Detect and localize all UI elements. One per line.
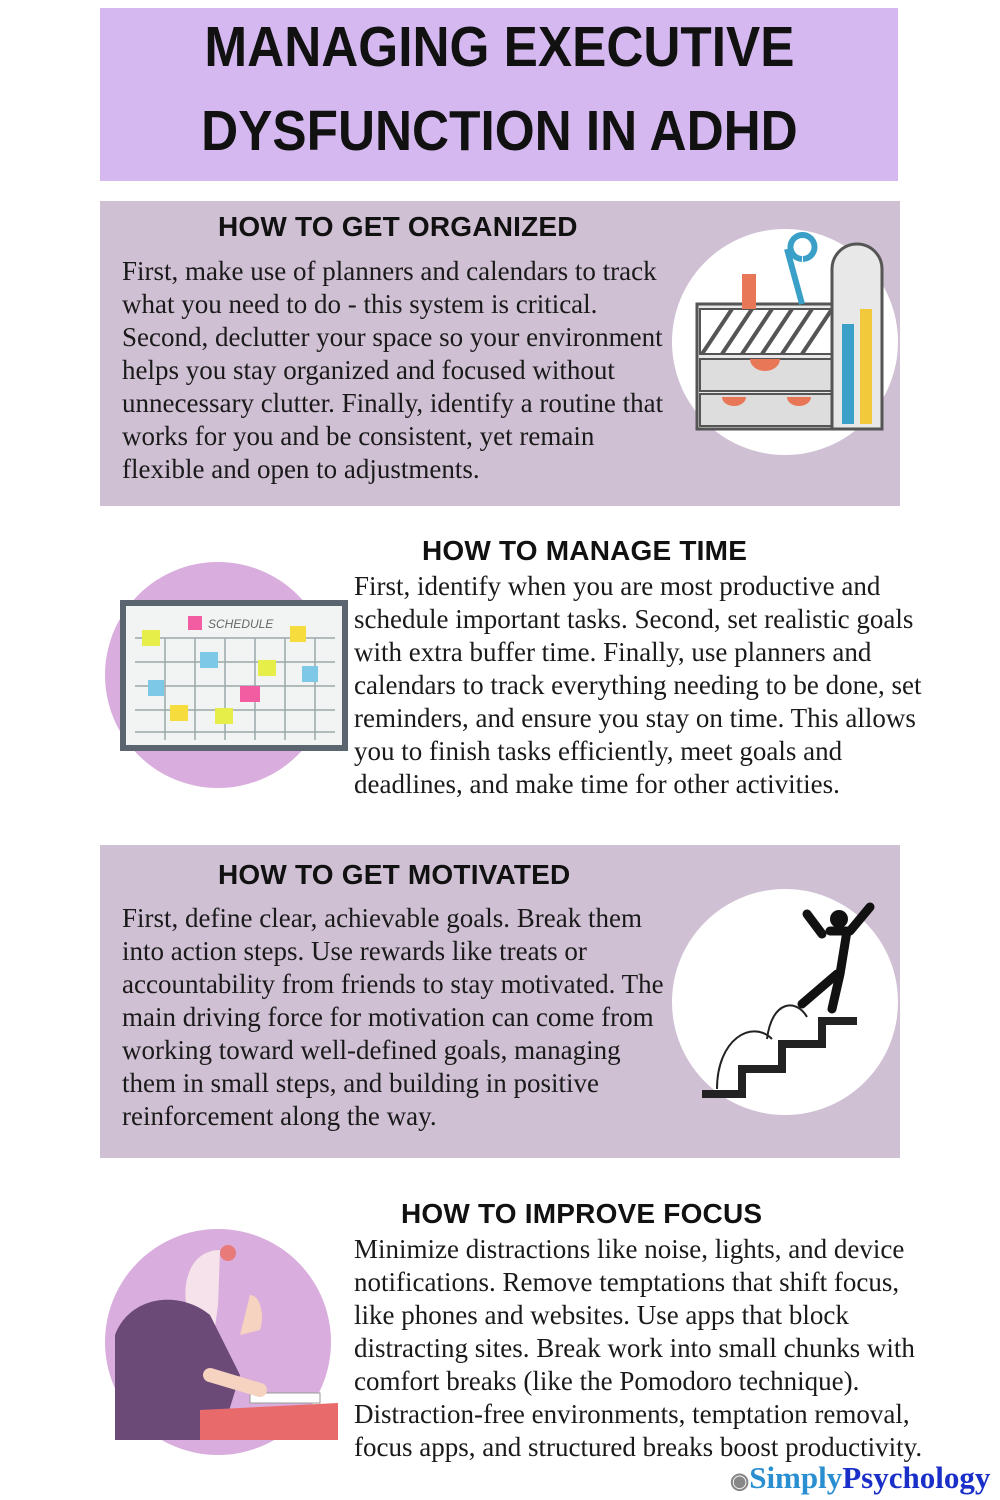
text: motivate: First, define clear, achievable goals. Break them — [122, 903, 642, 933]
text: motivate — [122, 903, 664, 1131]
text: motivate: reinforcement along the way. — [122, 1101, 437, 1131]
text: time: schedule important tasks. Second, set realistic goals — [354, 604, 913, 634]
text: motivate: into action steps. Use rewards like treats or — [122, 936, 587, 966]
text: focus: distracting sites. Break work into small chunks with — [354, 1333, 915, 1363]
text: focus — [354, 1234, 922, 1462]
text: time: deadlines, and make time for other activities. — [354, 769, 840, 799]
text: time: you to finish tasks efficiently, meet goals and — [354, 736, 842, 766]
text: time: calendars to track everything needing to be done, set — [354, 670, 922, 700]
heading: focus: HOW TO IMPROVE FOCUS — [401, 1198, 762, 1229]
text: motivate: them in small steps, and building in positive — [122, 1068, 599, 1098]
text: time — [354, 571, 922, 799]
text: motivate: working toward well-defined goals, managing — [122, 1035, 621, 1065]
icon: desk organizer — [672, 229, 898, 455]
text: organize — [122, 256, 663, 484]
panel: motivate — [100, 845, 900, 1158]
text: time: reminders, and ensure you stay on time. This allows — [354, 703, 916, 733]
heading: organize: HOW TO GET ORGANIZED — [218, 211, 578, 242]
text: time: with extra buffer time. Finally, use planners and — [354, 637, 871, 667]
text: organize: Second, declutter your space so your environment — [122, 322, 663, 352]
text: focus: focus apps, and structured breaks boost productivity. — [354, 1432, 922, 1462]
text: organize: what you need to do - this system is critical. — [122, 289, 597, 319]
text: organize: unnecessary clutter. Finally, identify a routine that — [122, 388, 663, 418]
icon: schedule board — [105, 562, 348, 788]
text: organize: flexible and open to adjustments. — [122, 454, 480, 484]
title — [100, 8, 898, 181]
text: organize: works for you and be consistent, yet remain — [122, 421, 594, 451]
logo: ◉SimplyPsychology — [730, 1460, 990, 1495]
text: motivate: accountability from friends to stay motivated. The — [122, 969, 664, 999]
heading: motivate: HOW TO GET MOTIVATED — [218, 859, 570, 890]
title: DYSFUNCTION IN ADHD — [201, 99, 797, 163]
text: organize: First, make use of planners and calendars to track — [122, 256, 657, 286]
text: focus: notifications. Remove temptations that shift focus, — [354, 1267, 899, 1297]
panel: organize — [100, 201, 900, 506]
icon: schedule board: SCHEDULE — [208, 617, 274, 631]
title: MANAGING EXECUTIVE — [204, 15, 794, 79]
icon: studying girl — [105, 1229, 338, 1455]
text: focus: Minimize distractions like noise, lights, and device — [354, 1234, 904, 1264]
text: focus: like phones and websites. Use apps that block — [354, 1300, 849, 1330]
icon: person on stairs — [672, 889, 898, 1115]
text: focus: Distraction-free environments, temptation removal, — [354, 1399, 910, 1429]
heading: time: HOW TO MANAGE TIME — [422, 535, 747, 566]
text: motivate: main driving force for motivation can come from — [122, 1002, 654, 1032]
text: time: First, identify when you are most productive and — [354, 571, 880, 601]
text: focus: comfort breaks (like the Pomodoro technique). — [354, 1366, 859, 1396]
text: organize: helps you stay organized and focused without — [122, 355, 615, 385]
